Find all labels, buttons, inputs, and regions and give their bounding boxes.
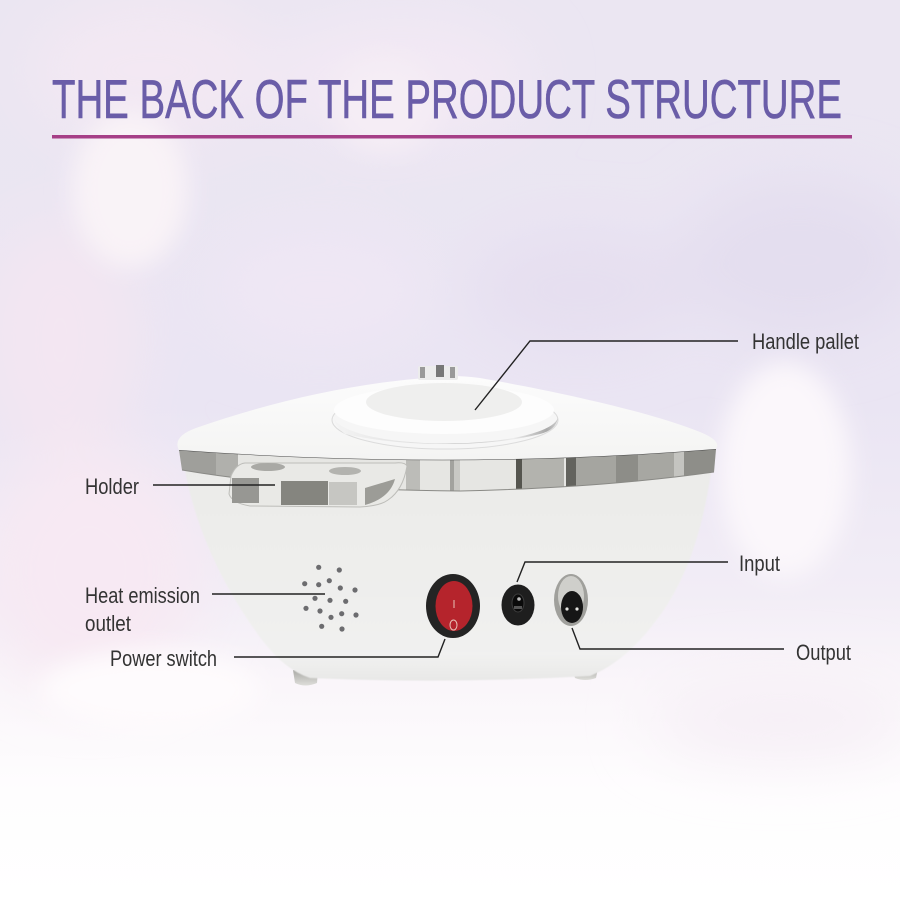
callout: power switch	[110, 639, 445, 671]
callout: heat emission outlet: Heat emission	[85, 583, 200, 608]
device top lid	[177, 376, 717, 460]
power switch	[426, 574, 480, 638]
product: device	[177, 365, 717, 686]
callout: output	[572, 628, 851, 665]
top connector	[418, 365, 458, 380]
device feet	[293, 668, 598, 686]
callout: input	[517, 551, 780, 582]
input jack	[502, 584, 534, 626]
callout: power switch: Power switch	[110, 646, 217, 671]
callout: heat emission outlet: outlet	[85, 611, 131, 636]
callout: holder: Holder	[85, 474, 139, 499]
callout: output: Output	[796, 640, 851, 665]
clear band	[179, 448, 716, 495]
callout: handle pallet: Handle pallet	[752, 329, 859, 354]
callout: input: Input	[739, 551, 780, 576]
holder	[229, 463, 407, 507]
title underline	[52, 135, 852, 138]
heat emission vents	[302, 565, 359, 632]
handle pallet	[332, 383, 558, 449]
callout: heat emission outlet	[85, 583, 325, 636]
callout: handle pallet	[475, 329, 859, 410]
device body bowl	[184, 465, 712, 681]
output connector	[554, 574, 588, 626]
